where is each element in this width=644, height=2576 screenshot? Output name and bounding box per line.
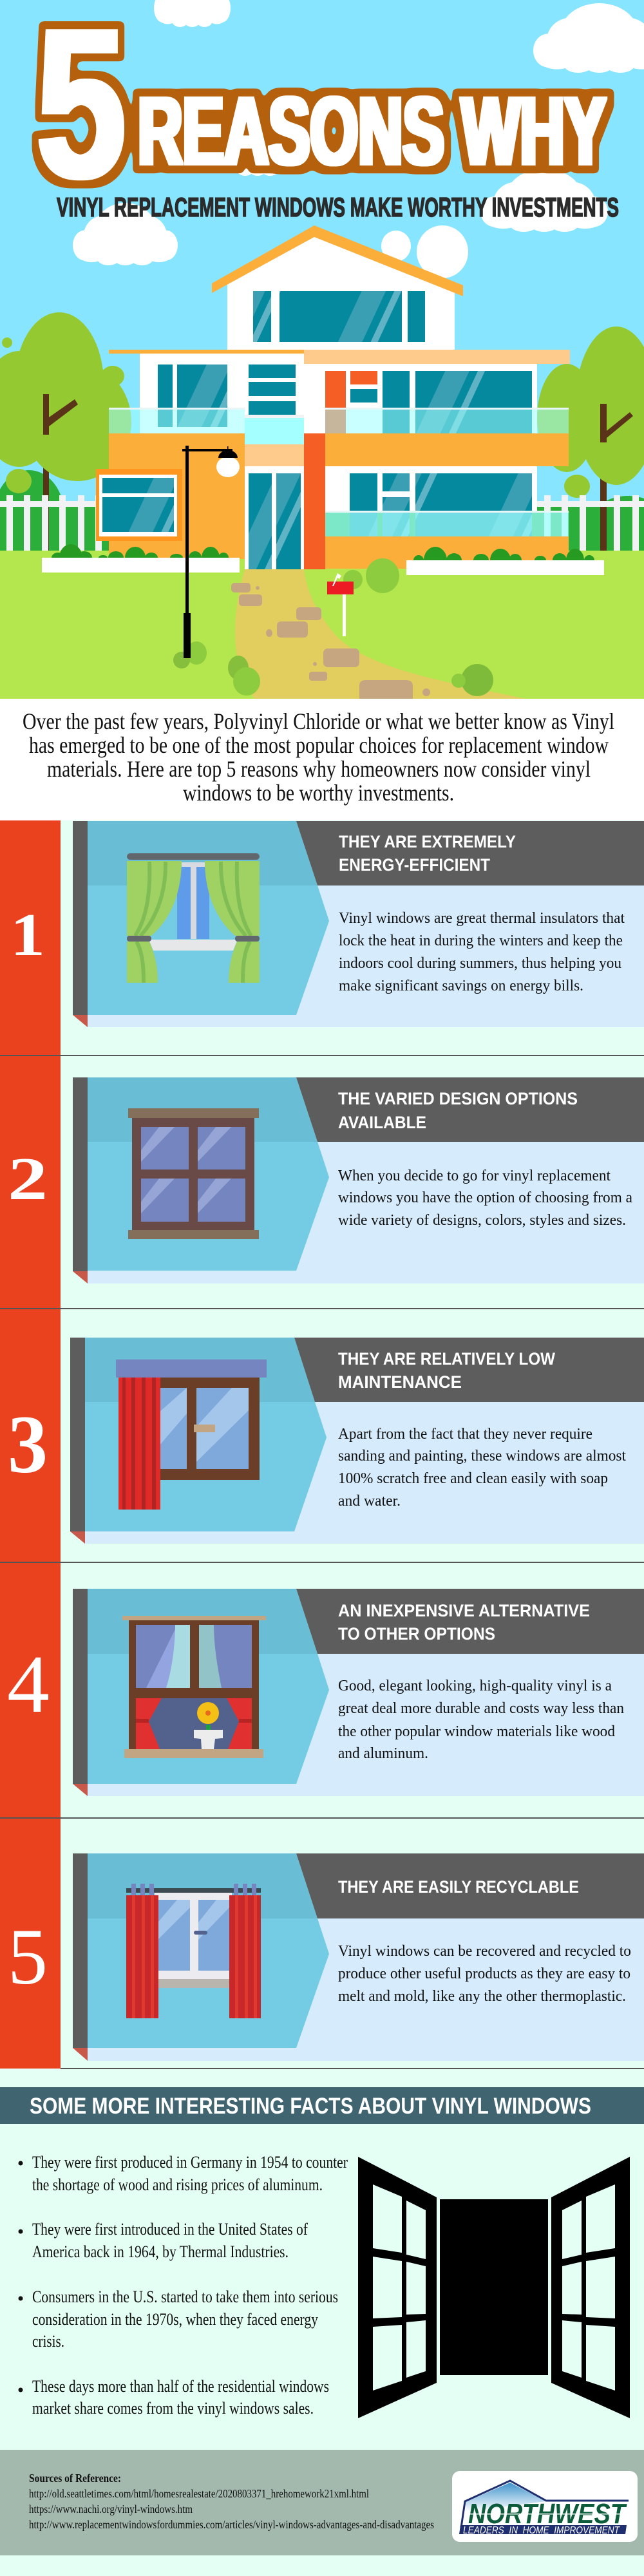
reason 5 heading: THEY ARE EASILY RECYCLABLE — [338, 1877, 579, 1897]
panel: reason 3 — [8, 1338, 644, 1544]
number 2: 2 — [8, 1146, 48, 1213]
reason 2 heading: THE VARIED DESIGN OPTIONS — [338, 1089, 578, 1108]
clouds — [73, 0, 644, 278]
garden path — [235, 569, 526, 699]
sources text — [29, 2472, 434, 2531]
reason 3 body text: 100% scratch free and clean easily with soap — [338, 1470, 608, 1487]
reason 2 body text: windows you have the option of choosing from a — [338, 1189, 632, 1206]
reason 1 body text: indoors cool during summers, thus helping you — [339, 955, 621, 972]
house: glass balconies — [109, 408, 569, 536]
intro text: windows to be worthy investments. — [183, 780, 454, 806]
fact text: the shortage of wood and rising prices of aluminum. — [32, 2175, 323, 2194]
reason 5 card background — [73, 1853, 644, 2061]
garden shrubs — [173, 558, 493, 696]
reason 4 body text: and aluminum. — [338, 1745, 428, 1762]
reason 2 heading — [338, 1089, 578, 1132]
reason 1 body text: lock the heat in during the winters and keep the — [339, 933, 623, 949]
hero illustration background: sky — [0, 0, 644, 554]
icon: open black window — [358, 2157, 630, 2418]
number 1: 1 — [10, 902, 45, 969]
street lamp — [182, 446, 240, 658]
reason 4 heading: AN INEXPENSIVE ALTERNATIVE — [338, 1601, 590, 1620]
panel: reason 2 — [8, 1077, 644, 1283]
icon: window with two red curtains — [126, 1884, 261, 2018]
planter bushes — [52, 544, 594, 574]
sources text: https://www.nachi.org/vinyl-windows.htm — [29, 2503, 193, 2515]
icon: brown four-pane window — [128, 1108, 259, 1239]
reason 2 body text: wide variety of designs, colors, styles and sizes. — [338, 1212, 626, 1229]
reason 2 body text — [338, 1168, 632, 1229]
panel: reason 4 — [7, 1589, 644, 1796]
house: ground floor body — [109, 433, 569, 569]
logo: Northwest: LEADERS IN HOME IMPROVEMENT — [463, 2525, 620, 2536]
icon: green curtain window — [127, 853, 260, 983]
house: left bay window — [96, 469, 182, 541]
house: second storey — [109, 350, 570, 438]
reason 4 heading — [338, 1601, 590, 1643]
reason 5 body text — [338, 1943, 631, 2005]
reason 1 heading: ENERGY-EFFICIENT — [339, 855, 490, 875]
reason 3 body text — [338, 1426, 626, 1510]
reason 3 heading: THEY ARE RELATIVELY LOW — [338, 1349, 555, 1368]
reason 4 card background — [73, 1589, 644, 1796]
facts banner — [0, 2087, 644, 2124]
picket fence — [0, 495, 644, 551]
fact text: Consumers in the U.S. started to take them into serious — [32, 2287, 338, 2306]
reason 5 body text: produce other useful products as they are easy to — [338, 1965, 630, 1982]
red number column — [0, 820, 61, 2069]
lawn — [0, 551, 644, 699]
reason 3 body text: Apart from the fact that they never require — [338, 1426, 592, 1443]
sources footer — [0, 2450, 644, 2555]
facts list — [18, 2153, 348, 2418]
fact text: market share comes from the vinyl windows sales. — [32, 2399, 314, 2418]
sources text: Sources of Reference: — [29, 2472, 121, 2485]
reason 5 body text: Vinyl windows can be recovered and recycled to — [338, 1943, 631, 1960]
reason 5 body text: melt and mold, like any the other thermoplastic. — [338, 1988, 626, 2005]
panel: reason 5 — [8, 1853, 644, 2061]
icon: window with flower pot — [122, 1616, 266, 1758]
tree: right — [537, 327, 644, 554]
house — [96, 225, 570, 569]
fact text: consideration in the 1970s, when they faced energy — [32, 2310, 318, 2329]
reason 1 heading: THEY ARE EXTREMELY — [339, 832, 516, 851]
reason 4 body text: great deal more durable and costs way less than — [338, 1700, 624, 1717]
number 5: 5 — [8, 1913, 48, 2001]
reason 4 heading: TO OTHER OPTIONS — [338, 1624, 495, 1643]
fact text: They were first produced in Germany in 1954 to counter — [32, 2153, 348, 2172]
fact text: crisis. — [32, 2332, 64, 2351]
number 4: 4 — [7, 1638, 50, 1730]
reason 1 heading — [339, 832, 516, 875]
reason 4 body text: Good, elegant looking, high-quality vinyl is a — [338, 1678, 612, 1694]
logo: Northwest — [452, 2471, 638, 2542]
reason 2 heading: AVAILABLE — [338, 1113, 426, 1132]
sources text: http://old.seattletimes.com/html/homesrealestate/2020803371_hrehomework21xml.html — [29, 2487, 369, 2500]
tree: left — [0, 312, 131, 554]
planter boxes — [42, 558, 604, 575]
reason 1 body text: make significant savings on energy bills. — [339, 978, 583, 994]
reason 3 body text: sanding and painting, these windows are almost — [338, 1448, 626, 1464]
fact text — [32, 2153, 348, 2418]
fact text: These days more than half of the residential windows — [32, 2377, 329, 2396]
number 3: 3 — [8, 1399, 48, 1490]
intro section — [0, 699, 644, 820]
fact bullets — [18, 2161, 23, 2392]
reason 2 card background — [73, 1077, 644, 1283]
house: top gable — [212, 225, 463, 350]
reason 3 body text: and water. — [338, 1493, 401, 1510]
reason 3 card background — [70, 1338, 644, 1544]
reason 3 heading: MAINTENANCE — [338, 1372, 462, 1392]
reason 1 card background — [73, 821, 644, 1027]
mailbox — [327, 573, 354, 636]
background hills and hedge — [0, 470, 644, 560]
title: 5 reasons why — [36, 0, 606, 223]
path stones — [231, 583, 430, 699]
intro text — [23, 708, 614, 806]
reason 3 heading — [338, 1349, 555, 1392]
reason 4 body text — [338, 1678, 624, 1762]
fact text: America back in 1964, by Thermal Industries. — [32, 2242, 289, 2261]
reason 4 body text: the other popular window materials like wood — [338, 1723, 615, 1740]
sources text: http://www.replacementwindowsfordummies.com/articles/vinyl-windows-advantages-and-disadvantages — [29, 2518, 434, 2531]
reason 1 body text: Vinyl windows are great thermal insulators that — [339, 910, 625, 927]
reason 1 body text — [339, 910, 625, 994]
panel: reason 1 — [10, 821, 644, 1027]
section divider lines — [0, 1055, 644, 2069]
icon: window with red curtain — [116, 1359, 267, 1510]
reason 2 body text: When you decide to go for vinyl replacement — [338, 1168, 611, 1184]
fact text: They were first introduced in the United States of — [32, 2220, 308, 2239]
reasons section background — [0, 820, 644, 2576]
